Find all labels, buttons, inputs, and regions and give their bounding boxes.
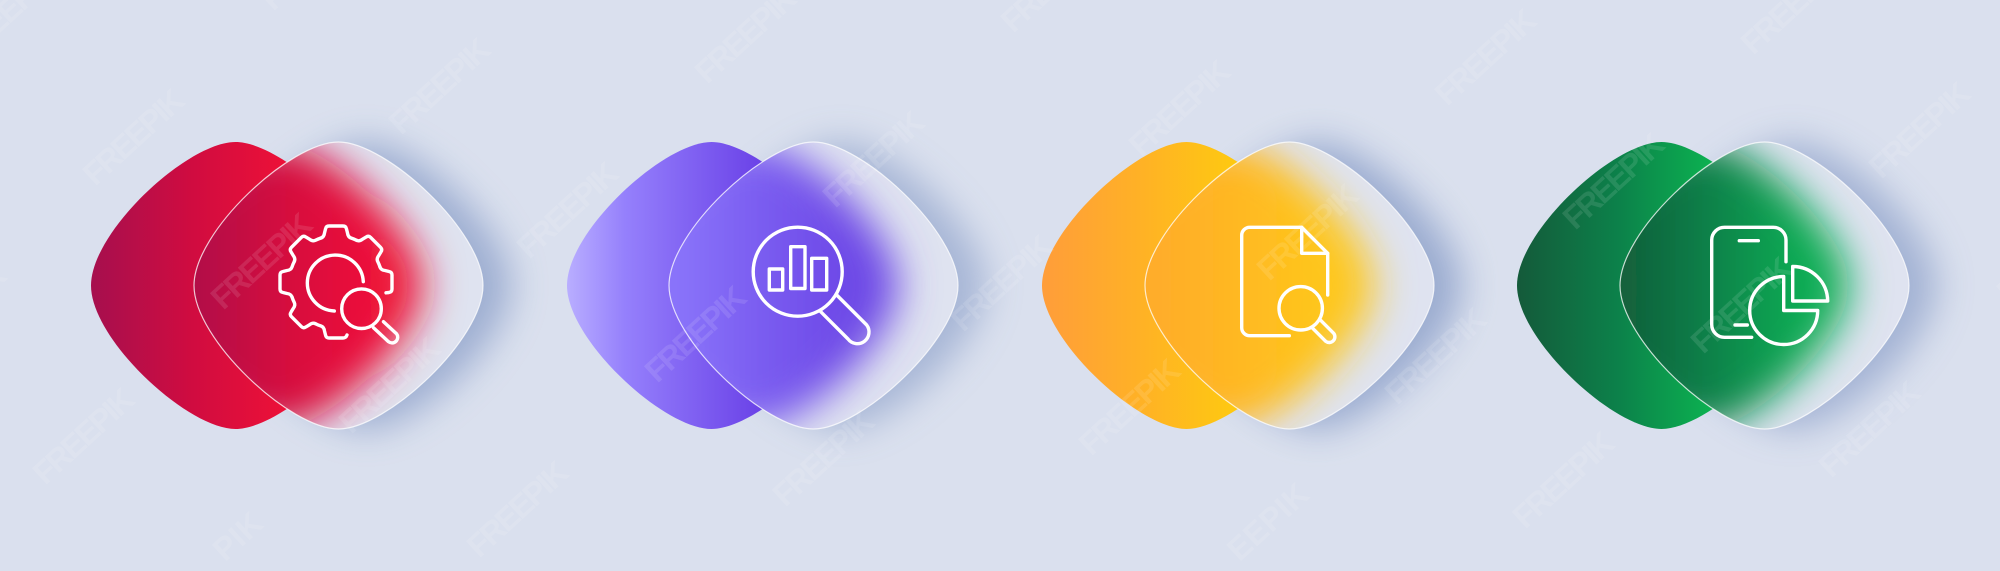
watermarks: FREEPIK bbox=[766, 403, 881, 513]
watermarks: FREEPIK bbox=[638, 279, 753, 389]
shadow: yellow group bbox=[1173, 142, 1462, 429]
back shape: yellow bbox=[1042, 142, 1331, 429]
icon group: yellow document search bbox=[1042, 142, 1462, 429]
icon: gear with magnifier bbox=[280, 226, 398, 343]
back shape: green bbox=[1517, 142, 1806, 429]
icon: magnifier with bars bbox=[753, 227, 869, 344]
watermarks: FREEPIK bbox=[204, 206, 319, 316]
glass shape: red bbox=[193, 141, 484, 430]
watermarks: FREEPIK bbox=[1684, 250, 1799, 360]
watermarks: FREEPIK bbox=[76, 82, 191, 192]
icon group: red gear search bbox=[91, 142, 511, 429]
watermarks: FREEPIK bbox=[1556, 126, 1671, 236]
icon group: purple chart search bbox=[567, 142, 986, 429]
back shape: purple bbox=[567, 142, 856, 429]
watermarks: EEPIK bbox=[1220, 476, 1316, 568]
watermarks: PIK bbox=[206, 505, 270, 568]
icon: document with magnifier bbox=[1242, 227, 1335, 343]
glass shape: yellow bbox=[1144, 141, 1435, 430]
watermarks: FREEPIK bbox=[944, 228, 1059, 338]
watermarks: FREEPIK bbox=[460, 454, 575, 564]
watermarks: FREEPIK bbox=[510, 155, 625, 265]
watermarks: FREEPIK bbox=[382, 31, 497, 141]
glass shape: green bbox=[1619, 141, 1910, 430]
glass shape: purple bbox=[668, 141, 959, 430]
shadow: green group bbox=[1648, 142, 1937, 429]
watermarks: FREEPIK bbox=[26, 381, 141, 491]
watermarks: FREEPIK bbox=[1250, 177, 1365, 287]
watermarks: FREEPIK bbox=[1072, 352, 1187, 462]
watermarks: FREEPIK bbox=[332, 330, 447, 440]
watermarks: FREEPIK bbox=[1812, 374, 1927, 484]
icon group: green phone pie chart bbox=[1517, 142, 1937, 429]
shadow: purple group bbox=[697, 142, 986, 429]
icon: phone with pie chart bbox=[1712, 227, 1828, 344]
shadow: red group bbox=[222, 142, 511, 429]
watermarks: FREEPIK bbox=[1506, 425, 1621, 535]
watermarks: FREEPIK bbox=[1378, 301, 1493, 411]
watermarks: FREEPIK bbox=[1862, 75, 1977, 185]
back shape: red bbox=[91, 142, 380, 429]
watermarks: FREEPIK bbox=[1122, 53, 1237, 163]
watermarks: FREEPIK bbox=[1428, 2, 1543, 112]
watermarks: FREEPIK bbox=[816, 104, 931, 214]
